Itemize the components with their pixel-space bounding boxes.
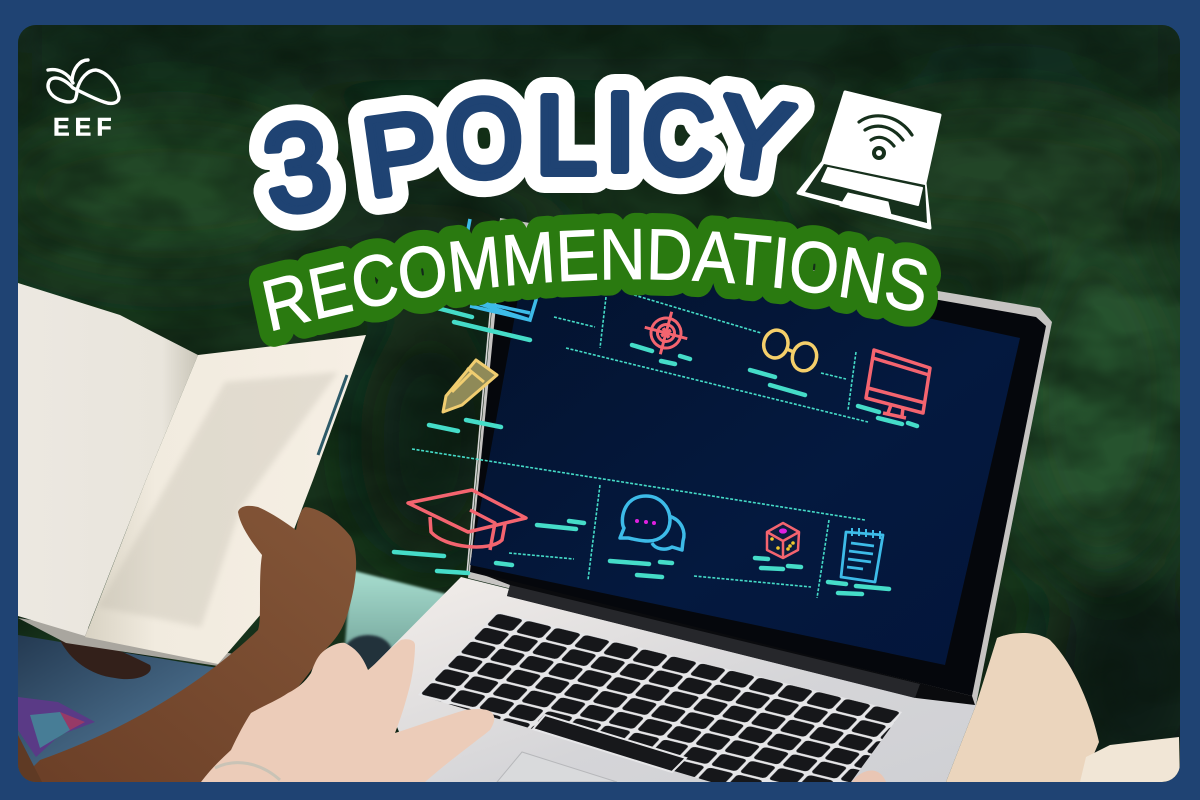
teal dashes (394, 308, 917, 594)
title navy letters: P (356, 88, 446, 220)
trackpad (497, 752, 617, 782)
logo: EEF (48, 60, 119, 142)
icon: monitor (866, 350, 930, 418)
plaid shirt (18, 697, 95, 757)
title white sticker outline: C (639, 72, 717, 199)
title white sticker outline: P (356, 88, 446, 220)
display (470, 284, 1020, 665)
icon: dice (767, 523, 799, 558)
icon: graduation cap (408, 490, 526, 550)
icon: pencil (443, 360, 497, 412)
dark arm and hand holding book (18, 506, 356, 782)
light hand on keyboard (201, 639, 494, 782)
laptop outer shape (798, 92, 940, 228)
finger at keyboard right (852, 770, 886, 782)
laptop trackpad (840, 193, 892, 219)
dashed connector lines (412, 295, 868, 598)
subtitle green outline: RECOMMENDATIONS (248, 212, 941, 347)
title navy letters (256, 71, 801, 240)
title white sticker outline: I (605, 71, 635, 194)
title: 3 POLICY (256, 71, 801, 240)
lid (468, 218, 1052, 705)
hologram icons and dashes over the screen (394, 219, 930, 598)
space bar (533, 715, 686, 772)
title navy letters: Y (709, 72, 801, 205)
dark object behind hand (344, 635, 392, 669)
icon: butterfly (48, 60, 119, 103)
title white sticker outline: L (535, 74, 597, 197)
title white sticker outline: O (442, 75, 526, 202)
title navy letters: 3 (256, 96, 339, 240)
jeans (18, 635, 214, 777)
title navy letters: L (535, 74, 597, 197)
title white sticker outline: Y (709, 72, 801, 205)
title navy letters: C (639, 72, 717, 199)
subtitle white letters: RECOMMENDATIONS (263, 228, 927, 331)
second book bottom right (1080, 737, 1180, 782)
subtitle: RECOMMENDATIONS (248, 212, 941, 347)
icon: chat dots (635, 519, 656, 525)
keyboard (418, 612, 902, 782)
icon: chat bubbles (620, 496, 684, 550)
book page edges (18, 618, 240, 666)
hinge (476, 572, 975, 705)
title navy letters: O (442, 75, 526, 202)
laptop (372, 218, 1052, 782)
teal bench (344, 569, 446, 649)
laptop keyboard (822, 168, 922, 205)
icon: notepad (841, 528, 883, 582)
base (372, 577, 976, 782)
icon: wifi laptop (798, 92, 940, 228)
title white sticker outline: 3 (256, 96, 339, 240)
open book (18, 283, 366, 679)
icon: target (639, 306, 693, 360)
bracelet (215, 763, 280, 780)
knee (946, 633, 1099, 782)
icon: glasses (759, 327, 821, 374)
laptop base recess (805, 164, 927, 223)
silver left lid edge (466, 308, 491, 571)
title navy letters: I (605, 71, 635, 194)
title white sticker outline (256, 71, 801, 240)
wifi symbol (859, 116, 912, 158)
hand under book (60, 638, 151, 679)
icon: blue book (466, 219, 536, 320)
logo wordmark: EEF (53, 114, 117, 142)
printed text on book (98, 372, 338, 627)
